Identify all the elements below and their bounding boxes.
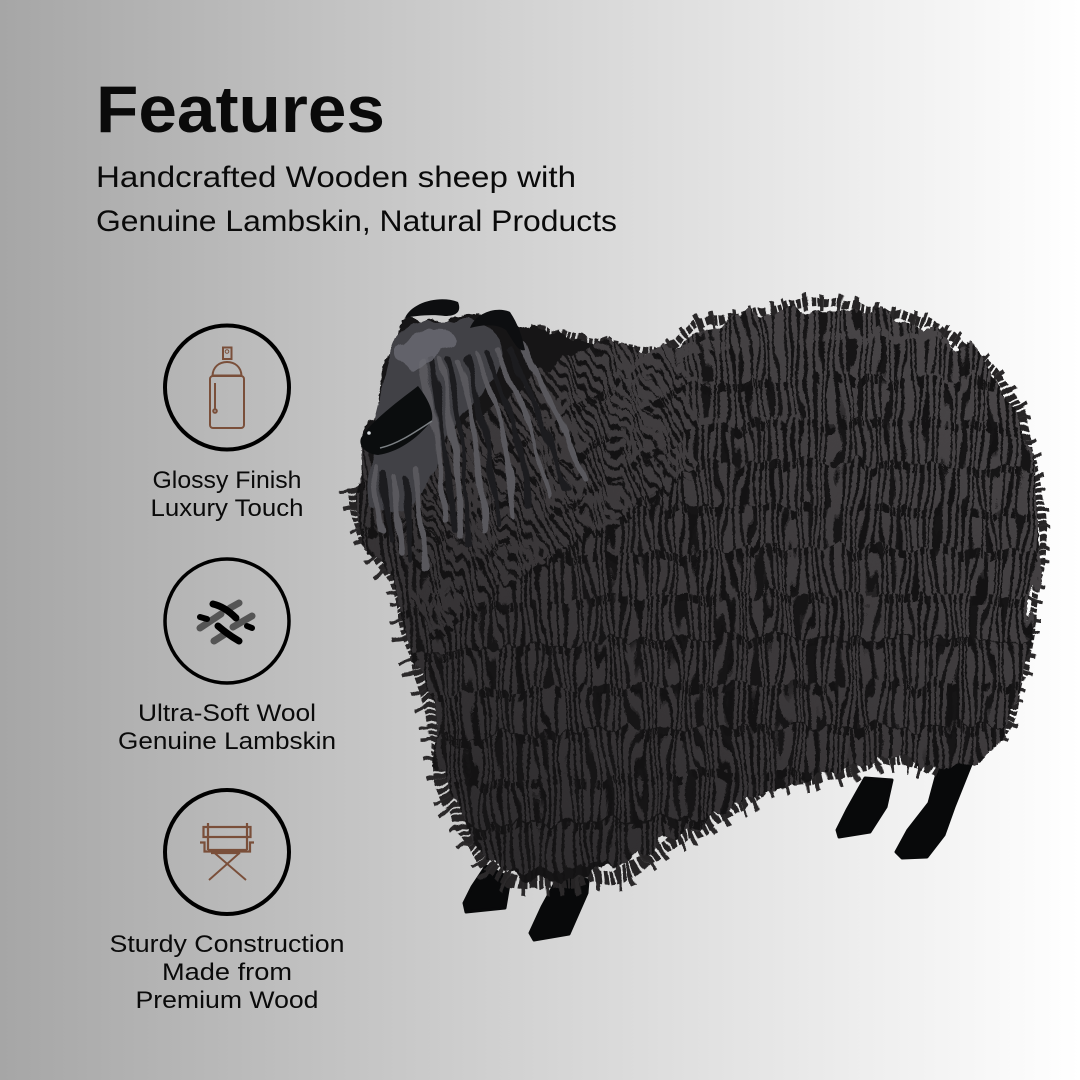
subtitle: Genuine Lambskin, Natural Products <box>96 205 617 238</box>
label: sturdy construction: Sturdy Construction <box>110 931 344 958</box>
icon circle: sturdy construction <box>165 790 289 914</box>
feature: glossy finish <box>150 326 304 522</box>
icon: director chair <box>200 823 254 880</box>
icon circle: wool <box>165 559 289 683</box>
subtitle: Handcrafted Wooden sheep with <box>96 161 576 194</box>
label: ultra-soft wool <box>118 700 336 755</box>
icon: spray can <box>210 348 244 428</box>
label: glossy finish: Glossy Finish <box>152 467 302 494</box>
neck strands sloping down from the head <box>420 340 690 620</box>
label: sturdy construction <box>110 931 344 1014</box>
subtitle <box>96 161 617 238</box>
label: glossy finish <box>150 467 304 522</box>
sheep legs <box>464 762 972 940</box>
label: sturdy construction: Made from <box>162 959 292 986</box>
title: Features <box>96 72 385 146</box>
sheep ear horns <box>405 299 525 350</box>
label: ultra-soft wool: Ultra-Soft Wool <box>138 700 316 727</box>
label: glossy finish: Luxury Touch <box>150 495 304 522</box>
sheep wool body <box>356 306 1042 884</box>
lower wool tiers <box>330 527 1070 868</box>
icon: woven strands <box>200 603 252 641</box>
icon circle: glossy finish <box>165 326 289 450</box>
label: ultra-soft wool: Genuine Lambskin <box>118 728 336 755</box>
sheep snout <box>360 386 432 455</box>
feature: ultra-soft wool <box>118 559 336 755</box>
feature: sturdy construction <box>110 790 344 1014</box>
label: sturdy construction: Premium Wood <box>136 987 318 1014</box>
sheep head fleece <box>369 320 584 566</box>
upper wool tiers <box>330 318 1070 516</box>
sheep product figure <box>330 295 1070 940</box>
sheep wool fringe <box>354 302 1041 883</box>
